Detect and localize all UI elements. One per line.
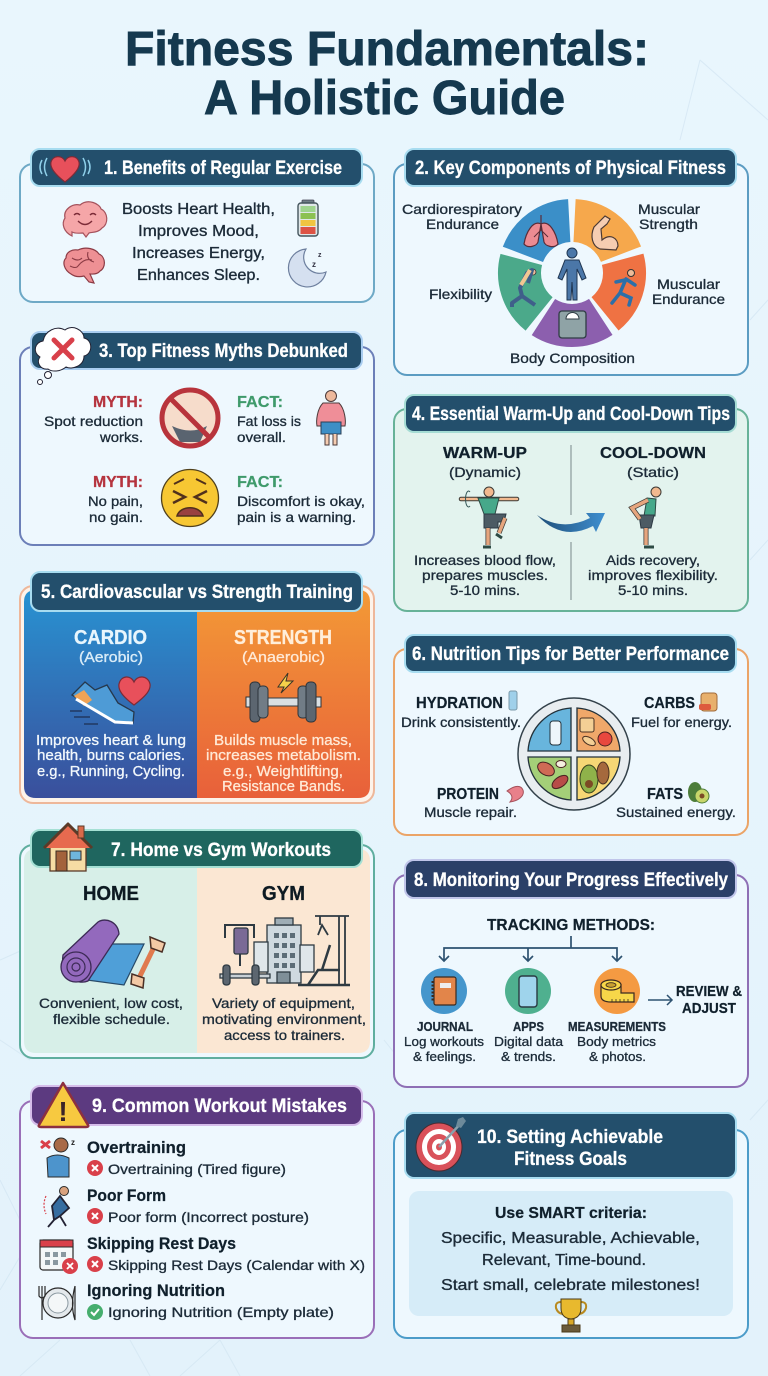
icon: yoga mat and band (61, 920, 165, 988)
mistake: poor form (44, 1186, 309, 1227)
text: benefits list: Boosts Heart Health, (122, 201, 275, 218)
myth 1 text: MYTH: (93, 394, 143, 411)
journal item (404, 968, 485, 1064)
callout: SMART criteria: Start small, celebrate milestones! (441, 1277, 700, 1294)
heading: section 10: Fitness Goals (514, 1148, 627, 1170)
fact 2 text: FACT: (237, 474, 283, 491)
strength column: STRENGTH (234, 627, 332, 649)
panel: 5 cardio vs strength (20, 572, 374, 803)
apps item: & trends. (501, 1049, 556, 1064)
chart: fitness wheel (498, 199, 646, 347)
icon: person (558, 248, 586, 300)
apps item: Digital data (494, 1034, 564, 1049)
fact 1 text: overall. (237, 429, 286, 445)
icon: empty plate (39, 1286, 75, 1320)
hydration text and icon (401, 691, 521, 730)
protein text and icon: PROTEIN (437, 786, 499, 803)
cool-down column: (Static) (627, 464, 679, 480)
fact 2 text: pain is a warning. (237, 509, 356, 525)
icon: yoga pose (512, 269, 536, 307)
icon: target with arrow (416, 1117, 466, 1171)
myth 2 text: MYTH: (93, 474, 143, 491)
icon: scale (559, 311, 586, 338)
hydration text and icon: HYDRATION (416, 695, 503, 712)
icon: lungs (524, 215, 558, 247)
strength column: Builds muscle mass, (214, 733, 352, 749)
journal item: Log workouts (404, 1034, 485, 1049)
labels: wheel components: Cardiorespiratory (402, 201, 522, 217)
cool-down column (588, 445, 718, 598)
panel: 2 key components (394, 149, 748, 375)
mistake: poor form: Poor form (Incorrect posture) (108, 1209, 309, 1225)
icon: thought bubble with X (35, 328, 91, 384)
warm-up column: prepares muscles. (422, 567, 548, 583)
icon: happy brain (63, 202, 107, 237)
icon: bad posture figure (44, 1186, 69, 1227)
strength column: Resistance Bands. (222, 779, 345, 795)
title (125, 23, 649, 125)
gym column: access to trainers. (224, 1027, 345, 1043)
cool-down column: COOL-DOWN (600, 445, 706, 462)
fact 2 text: Discomfort is okay, (237, 493, 365, 509)
panel: 6 nutrition tips (394, 635, 748, 835)
labels: wheel components: Endurance (652, 291, 725, 307)
text: benefits list: Increases Energy, (132, 245, 265, 262)
gym column (197, 849, 370, 1053)
journal item: JOURNAL (417, 1019, 473, 1034)
heading: section 6: 6. Nutrition Tips for Better Performance (412, 643, 729, 665)
callout: SMART criteria: Relevant, Time-bound. (482, 1252, 646, 1269)
heading: section 10 (405, 1113, 736, 1178)
myth 2 text (88, 474, 143, 525)
home column: Convenient, low cost, (39, 995, 183, 1011)
mistake: ignoring nutrition: Ignoring Nutrition (Empty plate) (108, 1304, 334, 1320)
cardio column: (Aerobic) (79, 650, 143, 666)
heading: section 5 (31, 572, 362, 611)
icon: no spot reduction (162, 390, 218, 446)
labels: wheel components: Muscular (657, 276, 720, 292)
fats text and icon: FATS (647, 786, 683, 803)
apps item (494, 968, 564, 1064)
review and adjust (676, 983, 742, 1017)
panel: 8 monitoring progress (394, 860, 748, 1087)
icon: moon (288, 249, 326, 287)
protein text and icon (424, 786, 523, 820)
icon: trophy (556, 1299, 586, 1332)
panel: 4 warm-up and cool-down (394, 395, 748, 611)
icon: pained face (162, 470, 218, 526)
icon: figure (317, 390, 345, 445)
icon: cool-down figure (632, 487, 661, 547)
protein text and icon: Muscle repair. (424, 804, 517, 820)
myth 2 text: No pain, (88, 493, 143, 509)
icon: calendar with X (40, 1240, 78, 1274)
text: benefits list: Improves Mood, (138, 223, 259, 240)
measurements item: Body metrics (577, 1034, 657, 1049)
callout: SMART criteria: Specific, Measurable, Achievable, (441, 1230, 700, 1247)
strength column (197, 590, 370, 798)
warm-up column: Increases blood flow, (414, 552, 556, 568)
strength column: (Anaerobic) (242, 650, 325, 666)
strength column: increases metabolism. (206, 748, 361, 764)
fats text and icon: Sustained energy. (616, 804, 736, 820)
measurements item (568, 968, 666, 1064)
carbs text and icon (631, 693, 732, 730)
cardio column: e.g., Running, Cycling. (37, 764, 185, 780)
heading: section 2 (405, 149, 736, 186)
icon: shoe and heart (70, 677, 150, 724)
heading: section 8: 8. Monitoring Your Progress Effectively (414, 869, 728, 891)
fact 1 text: Fat loss is (237, 413, 301, 429)
cool-down column: improves flexibility. (588, 567, 718, 583)
arrows: tracking tree (439, 936, 622, 961)
heading: section 8 (405, 860, 736, 898)
cool-down column: 5-10 mins. (618, 582, 688, 598)
home column: HOME (83, 883, 139, 905)
gym column: motivating environment, (202, 1011, 366, 1027)
icon: gym building and equipment (220, 916, 350, 985)
gym column: Variety of equipment, (212, 995, 355, 1011)
fact 1 text: FACT: (237, 394, 283, 411)
mistake: overtraining (41, 1138, 286, 1177)
heading: section 1: 1. Benefits of Regular Exercise (104, 157, 342, 179)
heading: section 3: 3. Top Fitness Myths Debunked (99, 340, 348, 362)
cool-down column: Aids recovery, (606, 552, 700, 568)
labels: wheel components: Flexibility (429, 286, 492, 302)
mistake: overtraining: Overtraining (87, 1138, 186, 1157)
apps item: APPS (513, 1019, 544, 1034)
heading: section 7 (31, 830, 362, 867)
icon: moon: z (318, 252, 322, 259)
mistake: overtraining: Overtraining (Tired figure) (108, 1161, 286, 1177)
labels: wheel components: Body Composition (510, 350, 635, 366)
myth 2 text: no gain. (89, 509, 143, 525)
mistake: skipping rest days: Skipping Rest Days (Calendar with X) (108, 1257, 365, 1273)
arrow: to review and adjust (648, 995, 672, 1005)
warm-up column: WARM-UP (443, 445, 527, 462)
icon: warning triangle (39, 1083, 88, 1127)
callout: SMART criteria: Use SMART criteria: (495, 1205, 647, 1222)
strength column: e.g., Weightlifting, (223, 764, 343, 780)
icon: warm-up figure (461, 487, 517, 547)
heading: section 10: 10. Setting Achievable (477, 1126, 663, 1148)
measurements item: MEASUREMENTS (568, 1019, 666, 1034)
icon: moon: z (312, 260, 316, 269)
myth 1 text: Spot reduction (44, 413, 143, 429)
mistake: skipping rest days (40, 1234, 365, 1274)
home column: flexible schedule. (53, 1011, 170, 1027)
panel: 10 setting goals (394, 1113, 748, 1338)
icon: dumbbell (246, 673, 321, 722)
icon: flexed arm (592, 216, 618, 250)
labels: wheel components: Muscular (638, 201, 700, 217)
heading: section 7: 7. Home vs Gym Workouts (111, 839, 331, 861)
hydration text and icon: Drink consistently. (401, 714, 521, 730)
heading: section 9: 9. Common Workout Mistakes (92, 1095, 347, 1117)
icon: tired figure: z (71, 1138, 75, 1147)
myth 1 text: works. (99, 429, 143, 445)
cardio column: Improves heart & lung (36, 733, 186, 749)
panel: 3 top fitness myths (20, 328, 374, 545)
warning mark: ! (58, 1096, 68, 1127)
mistake: skipping rest days: Skipping Rest Days (87, 1234, 236, 1253)
panel: 9 common workout mistakes (20, 1083, 374, 1338)
warm-up column (414, 445, 556, 598)
icon: brain (64, 248, 104, 283)
warm-up column: 5-10 mins. (450, 582, 520, 598)
gym column: GYM (262, 883, 305, 905)
measurements item: & photos. (589, 1049, 646, 1064)
review and adjust: ADJUST (682, 1000, 736, 1017)
arrow: warm-up to cool-down (537, 513, 605, 532)
heading: section 3 (31, 332, 362, 369)
mistake: ignoring nutrition: Ignoring Nutrition (87, 1281, 225, 1300)
labels: wheel components: Strength (639, 216, 698, 232)
warm-up column: (Dynamic) (449, 464, 521, 480)
journal item: & feelings. (413, 1049, 476, 1064)
icon: plate (518, 698, 630, 810)
panel: 7 home vs gym (20, 824, 374, 1058)
heading: section 6 (405, 635, 736, 672)
icon: tired figure (41, 1138, 75, 1177)
heading: section 4 (405, 395, 736, 432)
fact 1 text (237, 394, 301, 445)
panel: 1 benefits of regular exercise (20, 149, 374, 302)
title: Fitness Fundamentals: (125, 23, 649, 76)
labels: wheel components (402, 201, 725, 366)
callout: SMART criteria (409, 1191, 733, 1316)
home column (24, 849, 197, 1053)
cardio column: health, burns calories. (37, 748, 185, 764)
mistake: poor form: Poor Form (87, 1186, 166, 1205)
icon: house (44, 824, 92, 871)
myth 1 text (44, 394, 143, 445)
fats text and icon (616, 782, 736, 820)
heading: section 5: 5. Cardiovascular vs Strength Training (41, 581, 353, 603)
heading: section 1 (31, 149, 362, 186)
text: benefits list: Enhances Sleep. (137, 267, 260, 284)
cardio column: CARDIO (74, 627, 147, 649)
review and adjust: REVIEW & (676, 983, 742, 1000)
heading: tracking methods: TRACKING METHODS: (487, 917, 655, 934)
cardio column (24, 590, 197, 798)
heading: section 9 (31, 1086, 362, 1125)
fact 2 text (237, 474, 365, 525)
carbs text and icon: Fuel for energy. (631, 714, 732, 730)
icon: heart with pulses (40, 157, 90, 182)
icon: runner (612, 270, 635, 305)
text: benefits list (122, 201, 275, 284)
title: A Holistic Guide (204, 72, 565, 125)
carbs text and icon: CARBS (644, 695, 695, 712)
mistake: ignoring nutrition (39, 1281, 334, 1320)
labels: wheel components: Endurance (426, 216, 499, 232)
icon: battery (298, 200, 318, 236)
